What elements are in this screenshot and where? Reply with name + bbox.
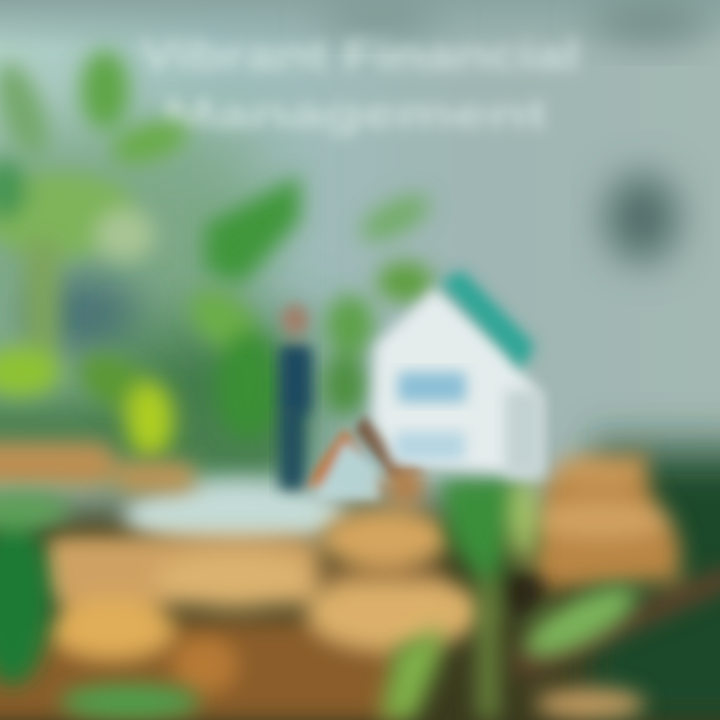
plants: foreground leaves: [0, 478, 645, 720]
house: small house in background: [300, 415, 425, 500]
house: main white house with teal roof: [372, 270, 543, 475]
plants: left foliage: [0, 50, 436, 458]
figure: person: [279, 304, 312, 490]
heading: Management: [162, 90, 548, 137]
heading: [140, 31, 580, 137]
water: pale ground: [123, 479, 347, 551]
coins: stacks: [0, 442, 720, 720]
heading: Vibrant Financial: [140, 31, 580, 80]
